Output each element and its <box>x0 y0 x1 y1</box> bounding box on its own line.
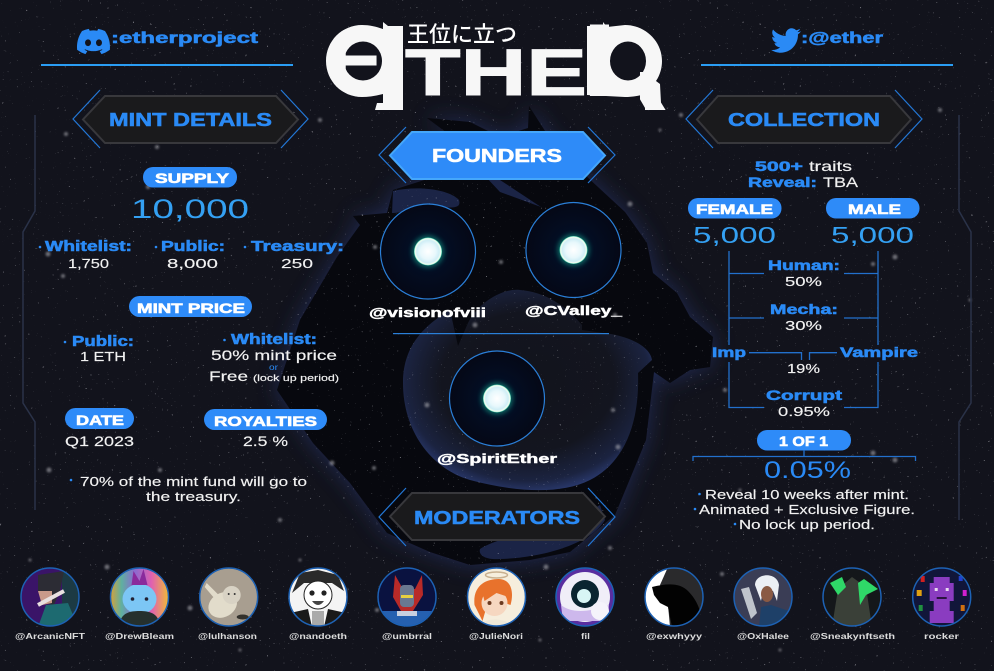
logo left ring <box>326 22 403 110</box>
human <box>768 257 840 289</box>
logo letter E: E <box>328 12 384 112</box>
date: Q1 2023 <box>65 434 134 449</box>
imp and vampire: Imp <box>712 344 746 360</box>
traits: traits <box>809 158 852 174</box>
supply pill <box>143 167 237 188</box>
whitelist price: or <box>269 362 278 372</box>
mint price pill <box>129 296 252 317</box>
one of one <box>693 430 916 484</box>
imp and vampire: Vampire <box>840 344 918 360</box>
traits <box>748 158 859 190</box>
side frame left <box>23 115 35 510</box>
moderator: umbrral <box>377 567 437 641</box>
public price: 1 ETH <box>80 349 126 364</box>
heading: moderators <box>379 488 615 546</box>
heading: founders <box>379 127 615 183</box>
panel: mint details <box>39 90 344 504</box>
logo <box>326 22 666 110</box>
dragon flames <box>392 160 605 559</box>
moderator: exwhyyy: @exwhyyy <box>646 631 702 641</box>
one of one notes: Animated + Exclusive Figure. <box>699 503 915 517</box>
moderator: JulieNori <box>466 567 526 641</box>
public price: Public: <box>72 334 134 350</box>
logo japanese subtitle: 王位に立つ <box>407 17 517 49</box>
handle text: :etherproject <box>111 30 259 47</box>
heading: moderators: MODERATORS <box>414 508 580 528</box>
moderator: Sneakynftseth: @Sneakynftseth <box>810 631 895 641</box>
one of one notes: Reveal 10 weeks after mint. <box>705 488 909 502</box>
date: DATE <box>76 412 124 428</box>
supply number: 10,000 <box>131 194 249 224</box>
logo right ring <box>587 22 665 110</box>
heading: mint details <box>73 90 308 148</box>
traits: Reveal: <box>748 174 817 190</box>
moderator: DrewBleam <box>105 567 175 641</box>
date <box>65 408 134 449</box>
founder: visionofviii <box>369 204 486 320</box>
corrupt: Corrupt <box>766 387 842 403</box>
one of one: 0.05% <box>764 457 851 484</box>
dragon silhouette <box>277 106 713 565</box>
icon: discord <box>77 29 110 54</box>
female: FEMALE <box>696 201 773 217</box>
supply breakdown: 1,750 <box>68 256 109 271</box>
human: 50% <box>785 274 823 289</box>
dragon inner moon <box>403 290 652 490</box>
founder: SpiritEther <box>437 351 557 466</box>
panel: collection <box>686 90 922 532</box>
treasury note: 70% of the mint fund will go to <box>80 474 307 489</box>
moderator: lulhanson <box>198 567 259 641</box>
moderator: rocker <box>912 567 972 641</box>
female: 5,000 <box>693 222 776 248</box>
male: 5,000 <box>831 222 914 248</box>
founder: CValley <box>525 202 623 318</box>
heading: mint details: MINT DETAILS <box>109 110 272 130</box>
mecha: Mecha: <box>770 301 838 317</box>
panel: founders <box>369 127 623 466</box>
trait tree <box>712 251 918 419</box>
supply breakdown: 8,000 <box>167 256 218 271</box>
moderator: ArcanicNFT: @ArcanicNFT <box>15 631 86 641</box>
male: MALE <box>848 201 901 217</box>
human: Human: <box>768 257 840 273</box>
founder: CValley: @CValley_ <box>525 303 623 318</box>
mecha <box>770 301 838 333</box>
twitter handle <box>771 28 883 53</box>
public price <box>64 334 134 364</box>
supply breakdown: Public: <box>161 239 225 255</box>
moderator: lulhanson: @lulhanson <box>198 631 257 641</box>
corrupt <box>766 387 842 419</box>
handle text: :@ether <box>801 30 883 47</box>
moderator: exwhyyy <box>644 567 704 641</box>
panel: moderator avatars <box>15 567 972 641</box>
logo letter R: R <box>582 0 668 137</box>
moderator: nandoeth: @nandoeth <box>289 631 347 641</box>
moderator: OxHalee <box>733 567 793 641</box>
founder: visionofviii: @visionofviii <box>369 305 486 320</box>
one of one notes: No lock up period. <box>739 518 875 532</box>
icon: twitter <box>771 28 801 53</box>
imp and vampire <box>712 344 918 376</box>
corrupt: 0.95% <box>778 404 831 419</box>
moderator: fil: fil <box>581 631 590 641</box>
female <box>688 198 782 248</box>
moderator: fil <box>555 567 615 641</box>
supply breakdown: Treasury: <box>251 239 344 255</box>
supply breakdown: Whitelist: <box>45 239 132 255</box>
traits: 500+ <box>755 158 803 174</box>
moderator: ArcanicNFT <box>15 567 86 641</box>
supply pill: SUPPLY <box>155 170 230 186</box>
one of one: 1 OF 1 <box>779 433 828 449</box>
moderator: nandoeth <box>288 567 348 641</box>
side frame right <box>959 115 971 520</box>
logo letters THE: THE <box>405 35 587 109</box>
heading: founders: FOUNDERS <box>432 146 562 166</box>
mint price pill: MINT PRICE <box>137 300 245 316</box>
imp and vampire: 19% <box>787 361 821 376</box>
supply breakdown <box>39 239 344 271</box>
royalties: ROYALTIES <box>214 413 317 429</box>
heading: collection: COLLECTION <box>728 110 880 130</box>
moderator: OxHalee: @OxHalee <box>737 631 789 641</box>
heading: collection <box>686 90 922 148</box>
treasury note <box>70 474 307 504</box>
whitelist price <box>209 332 339 384</box>
royalties <box>204 409 327 449</box>
moderator: Sneakynftseth <box>810 567 895 641</box>
mecha: 30% <box>785 318 823 333</box>
whitelist price: 50% mint price <box>211 347 337 363</box>
whitelist price: (lock up period) <box>253 373 339 383</box>
supply breakdown: 250 <box>281 256 313 271</box>
royalties: 2.5 % <box>243 434 288 449</box>
traits: TBA <box>823 174 859 190</box>
moderator: JulieNori: @JulieNori <box>469 631 523 641</box>
one of one notes <box>694 488 915 532</box>
founder: SpiritEther: @SpiritEther <box>437 451 557 466</box>
moderator: rocker: rocker <box>924 631 960 641</box>
whitelist price: Free <box>209 368 248 384</box>
moderator: umbrral: @umbrral <box>382 631 432 641</box>
discord handle <box>77 29 259 54</box>
moderator: DrewBleam: @DrewBleam <box>105 631 175 641</box>
treasury note: the treasury. <box>146 489 241 504</box>
whitelist price: Whitelist: <box>231 332 317 348</box>
male <box>826 198 920 248</box>
